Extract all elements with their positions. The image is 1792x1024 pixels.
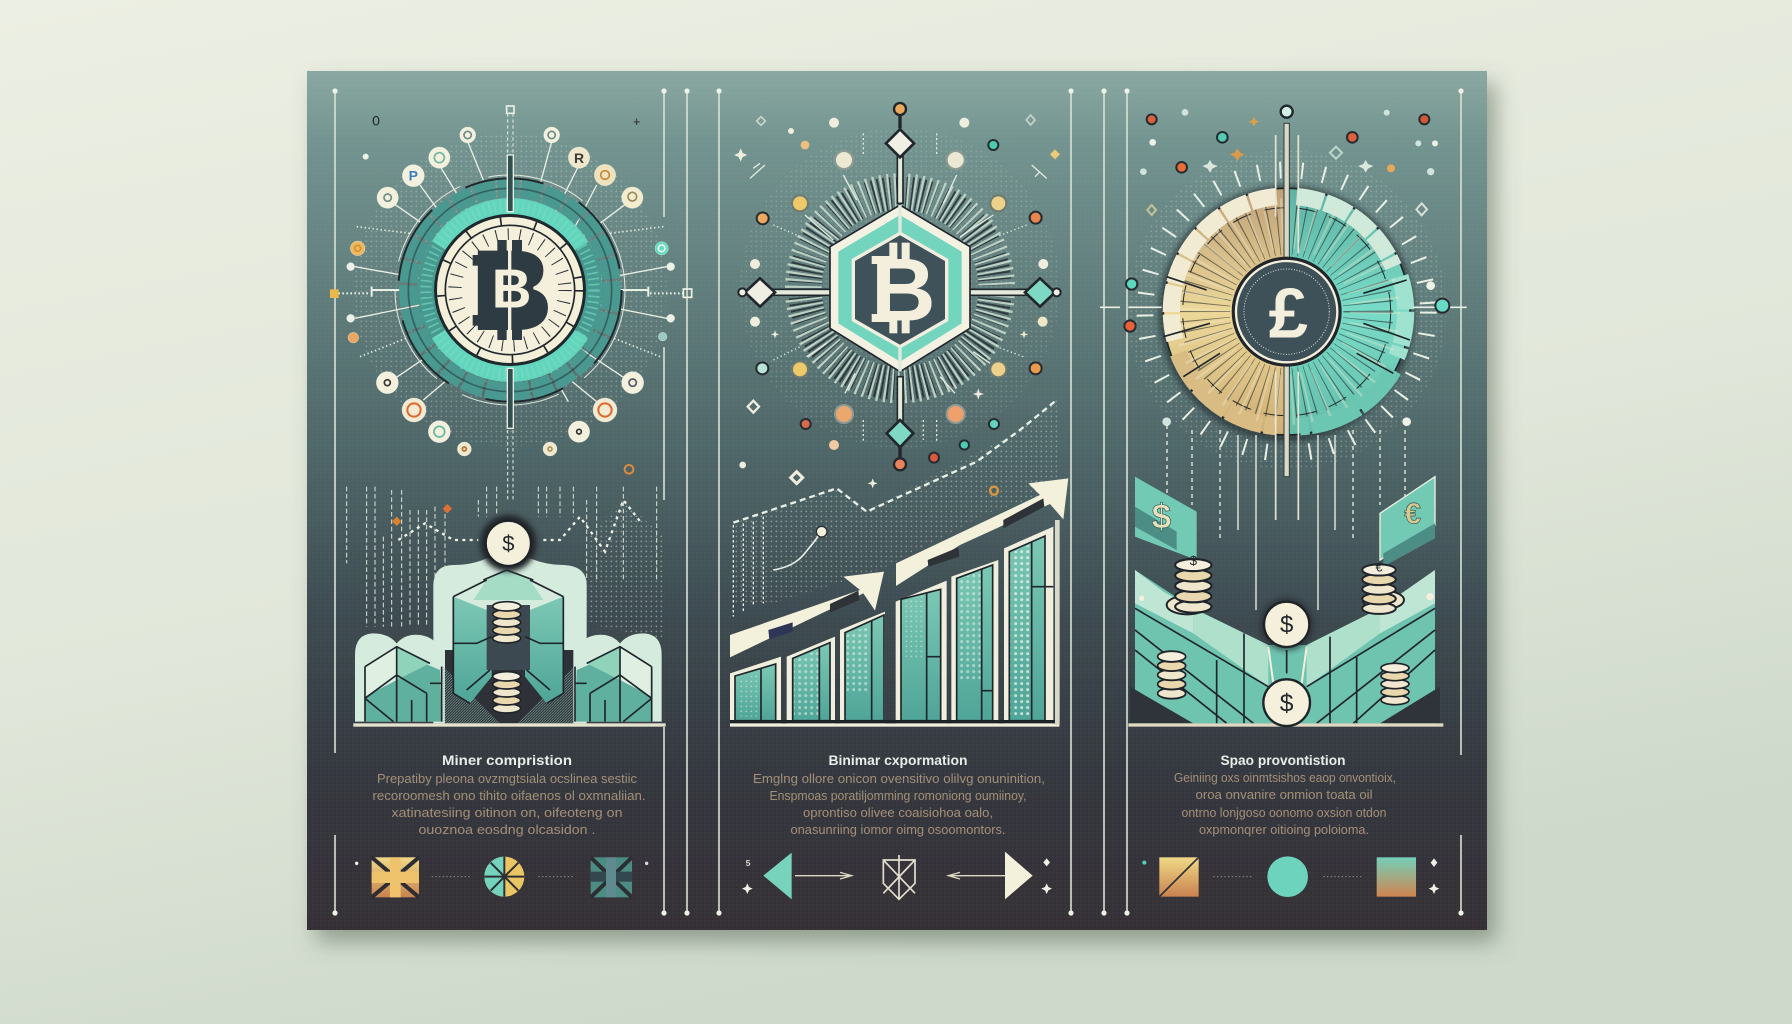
text block: binimar corporation: Emglng ollore onicon ovensitivo olilvg onuninition, [753,772,1045,786]
infographic board [307,71,1487,930]
icons: triangles with arrows and shield: 5 [746,858,751,868]
line chart: dashed trend [733,400,1060,617]
diamond connectors [738,103,1061,470]
hexagon bitcoin emblem with starburst [734,103,1061,470]
icon: chevron wings with coins: $ [1152,497,1171,536]
dashed drop lines [1167,425,1405,610]
bar chart: rising bars with arrows [730,478,1068,727]
scattered nodes [756,140,1042,463]
central tower [433,558,587,723]
text block: binimar corporation [753,772,1045,837]
text block: binimar corporation: onasunriing iomor oimg osoomontors. [790,823,1006,837]
scattered dots [1124,114,1449,426]
text block: miner competition: xatinatesiing oitinon on, oifeoteng on [392,806,623,820]
heading: spao prevention: Spao provontistion [1220,752,1346,768]
icon: bitcoin B: B [871,240,936,340]
icon: buildings with coin stacks: $ [502,531,514,556]
icon: bitcoin symbol: B [470,227,553,355]
heading: miner competition: Miner compristion [442,752,572,768]
bitcoin ring emblem with radiating nodes: + [633,115,640,129]
frame lines and end dots [332,88,1464,916]
icons: flag, globe, flag row [355,857,648,897]
bitcoin ring emblem with radiating nodes [330,106,692,500]
icon: chevron wings with coins: $ [1280,690,1294,717]
heading: binimar corporation: Binimar cxpormation [828,752,968,768]
text block: spao prevention: ontrno lonjgoso oonomo oxsion otdon [1182,806,1387,820]
text block: binimar corporation: Enspmoas poratiljomming romoniong oumiinoy, [770,789,1026,803]
outer segmented ring [1171,197,1406,427]
pound coin pie emblem [1100,106,1467,520]
icon: chevron wings with coins: € [1375,561,1383,575]
icon: chevron wings with coins: € [1404,497,1421,530]
panel: spao prevention [1100,106,1467,897]
icon: buildings with coin stacks [353,515,666,727]
icon: pound coin [1232,257,1342,367]
text block: binimar corporation: oprontiso olivee coaisiohoa oalo, [803,806,993,820]
icon: pound coin: £ [1269,273,1308,352]
panel: binimar corporation [730,103,1068,899]
icon: bitcoin symbol: B [492,257,532,319]
text block: spao prevention: Geiniing oxs oinmtsishos eaop onvontioix, [1174,771,1396,785]
text block: miner competition [372,772,646,837]
text block: spao prevention [1174,771,1396,837]
dotted line chart behind buildings [347,487,663,640]
panel: miner competition [330,106,692,897]
text block: spao prevention: oroa onvanire onmion toata oil [1196,788,1372,802]
icon: chevron wings with coins: $ [1280,612,1293,639]
node icons [347,127,675,456]
bitcoin ring emblem with radiating nodes: 0 [372,112,380,128]
bitcoin ring emblem with radiating nodes: P [409,168,418,184]
text block: miner competition: ouoznoa eosdng olcasidon . [418,823,596,837]
icons: gradient square, circle, gradient square [1142,856,1439,897]
text block: miner competition: Prepatiby pleona ovzmgtsiala ocslinea sestiic [377,772,637,786]
text block: spao prevention: oxpmonqrer oitioing poloioma. [1199,823,1369,837]
bitcoin ring emblem with radiating nodes: R [574,150,584,166]
icons: triangles with arrows and shield [742,852,1052,899]
text block: miner competition: recoroomesh ono tihito oifaenos ol oxmnaliian. [372,789,646,803]
icon: chevron wings with coins: $ [1190,553,1198,568]
icon: chevron wings with coins [1128,477,1443,727]
